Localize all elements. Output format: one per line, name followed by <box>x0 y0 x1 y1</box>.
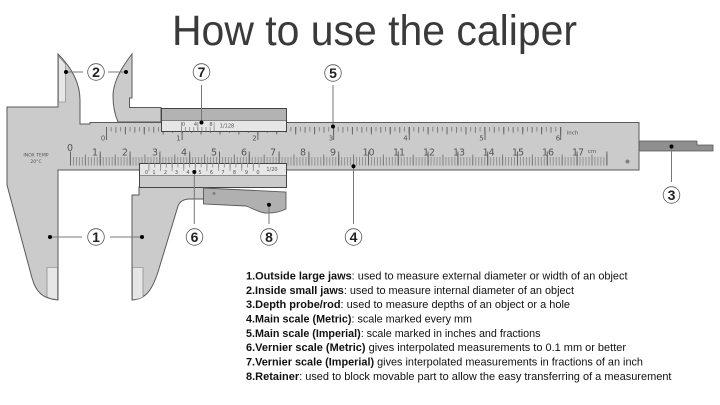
beam engraving: INOX TEMP <box>23 152 49 158</box>
caliper diagram <box>7 54 713 300</box>
main scale imperial labels: 2 <box>252 134 257 142</box>
metric vernier slider: 4 <box>186 170 190 176</box>
main scale metric labels: 0 <box>67 143 73 154</box>
main scale metric labels <box>67 143 596 158</box>
legend item 4: 4.Main scale (Metric): scale marked every mm <box>246 314 472 326</box>
callout 5: main scale imperial <box>325 65 341 128</box>
metric vernier slider <box>140 163 286 188</box>
metric vernier slider: 5 <box>198 170 202 176</box>
callout 1: outside large jaws <box>48 229 144 245</box>
main scale imperial labels: 4 <box>403 134 408 142</box>
movable jaw tip highlight <box>132 268 143 300</box>
main scale imperial labels: 0 <box>101 134 105 142</box>
legend item 6: 6.Vernier scale (Metric) gives interpolated measurements to 0.1 mm or better <box>246 342 626 354</box>
retainer <box>204 188 286 213</box>
metric vernier slider: 2 <box>164 170 167 176</box>
imperial vernier slider: 1/128 <box>220 124 234 130</box>
legend item 3: 3.Depth probe/rod: used to measure depths of an object or a hole <box>246 299 570 311</box>
callout 1: outside large jaws: 1 <box>92 229 100 245</box>
outside movable jaw <box>132 187 204 300</box>
main scale metric labels: cm <box>588 149 596 155</box>
metric vernier slider: 7 <box>221 170 225 176</box>
metric vernier slider: 3 <box>175 170 178 176</box>
callout 2: inside small jaws <box>64 64 128 80</box>
callout 7: vernier imperial: 7 <box>198 64 206 80</box>
callout 6: vernier metric <box>186 170 203 245</box>
legend item 2: 2.Inside small jaws: used to measure internal diameter of an object <box>246 285 574 297</box>
callout 4: main scale metric: 4 <box>350 229 358 245</box>
main scale imperial labels: 5 <box>479 134 484 142</box>
main scale metric labels: 6 <box>241 147 247 158</box>
main scale imperial labels: 3 <box>329 134 333 142</box>
depth probe rod <box>639 141 713 151</box>
main scale metric labels: 11 <box>393 147 405 158</box>
title: How to use the caliper <box>172 7 577 55</box>
metric vernier slider: 9 <box>245 170 248 176</box>
callout 3: depth probe: 3 <box>668 187 676 203</box>
metric vernier slider: 1 <box>152 170 156 176</box>
main scale metric labels: 2 <box>122 147 128 158</box>
callout 8: retainer <box>261 203 277 245</box>
imperial vernier slider: 8 <box>209 122 213 128</box>
legend item 7: 7.Vernier scale (Imperial) gives interpolated measurements in fractions of an inch <box>246 356 643 368</box>
main scale metric labels: 8 <box>300 147 306 158</box>
beam engraving <box>23 152 49 165</box>
main scale metric ticks <box>70 152 608 166</box>
main scale metric labels: 15 <box>512 147 524 158</box>
main scale metric labels: 3 <box>152 147 158 158</box>
main scale metric labels: 9 <box>330 147 336 158</box>
main scale imperial ticks <box>106 127 562 140</box>
main scale metric labels: 5 <box>211 147 217 158</box>
legend text block <box>246 270 672 383</box>
callout 7: vernier imperial <box>193 64 210 124</box>
fixed jaw and main beam <box>7 54 639 300</box>
callout 6: vernier metric: 6 <box>191 229 199 245</box>
retainer screw <box>212 192 216 195</box>
main scale metric labels: 4 <box>181 147 187 158</box>
fixed jaw tip highlights <box>47 56 66 300</box>
main scale metric labels: 13 <box>453 147 465 158</box>
imperial vernier slider: 0 <box>182 122 185 128</box>
main scale imperial labels: 6 <box>556 134 561 142</box>
main scale imperial labels: inch <box>567 130 579 136</box>
callout 3: depth probe <box>663 144 680 203</box>
metric vernier slider: 0 <box>256 170 260 176</box>
beam screw <box>626 160 630 164</box>
beam engraving: 20°C <box>30 159 42 165</box>
main scale metric labels: 12 <box>423 147 435 158</box>
legend item 8: 8.Retainer: used to block movable part to allow the easy transferring of a measurement <box>246 371 672 383</box>
main scale imperial labels <box>101 130 579 142</box>
main scale metric labels: 14 <box>483 147 495 158</box>
inside small jaw <box>113 54 161 122</box>
callout 8: retainer: 8 <box>265 229 273 245</box>
callout 2: inside small jaws: 2 <box>92 64 100 80</box>
legend item 1: 1.Outside large jaws: used to measure external diameter or width of an object <box>246 270 628 282</box>
main scale metric labels: 17 <box>572 147 584 158</box>
main scale metric labels: 16 <box>542 147 554 158</box>
legend item 5: 5.Main scale (Imperial): scale marked in inches and fractions <box>246 328 541 340</box>
metric vernier slider: 0 <box>145 170 148 176</box>
main scale metric labels: 10 <box>362 147 375 158</box>
imperial vernier slider <box>162 108 286 132</box>
metric vernier slider: 1/20 <box>266 167 278 173</box>
main scale imperial labels: 1 <box>176 134 181 142</box>
callout 4: main scale metric <box>345 164 362 245</box>
imperial vernier slider: 4 <box>194 122 197 128</box>
main scale metric labels: 1 <box>92 147 98 158</box>
metric vernier slider: 6 <box>210 170 213 176</box>
callout 5: main scale imperial: 5 <box>329 65 337 81</box>
metric vernier slider: 8 <box>233 170 236 176</box>
main scale metric labels: 7 <box>270 147 276 158</box>
